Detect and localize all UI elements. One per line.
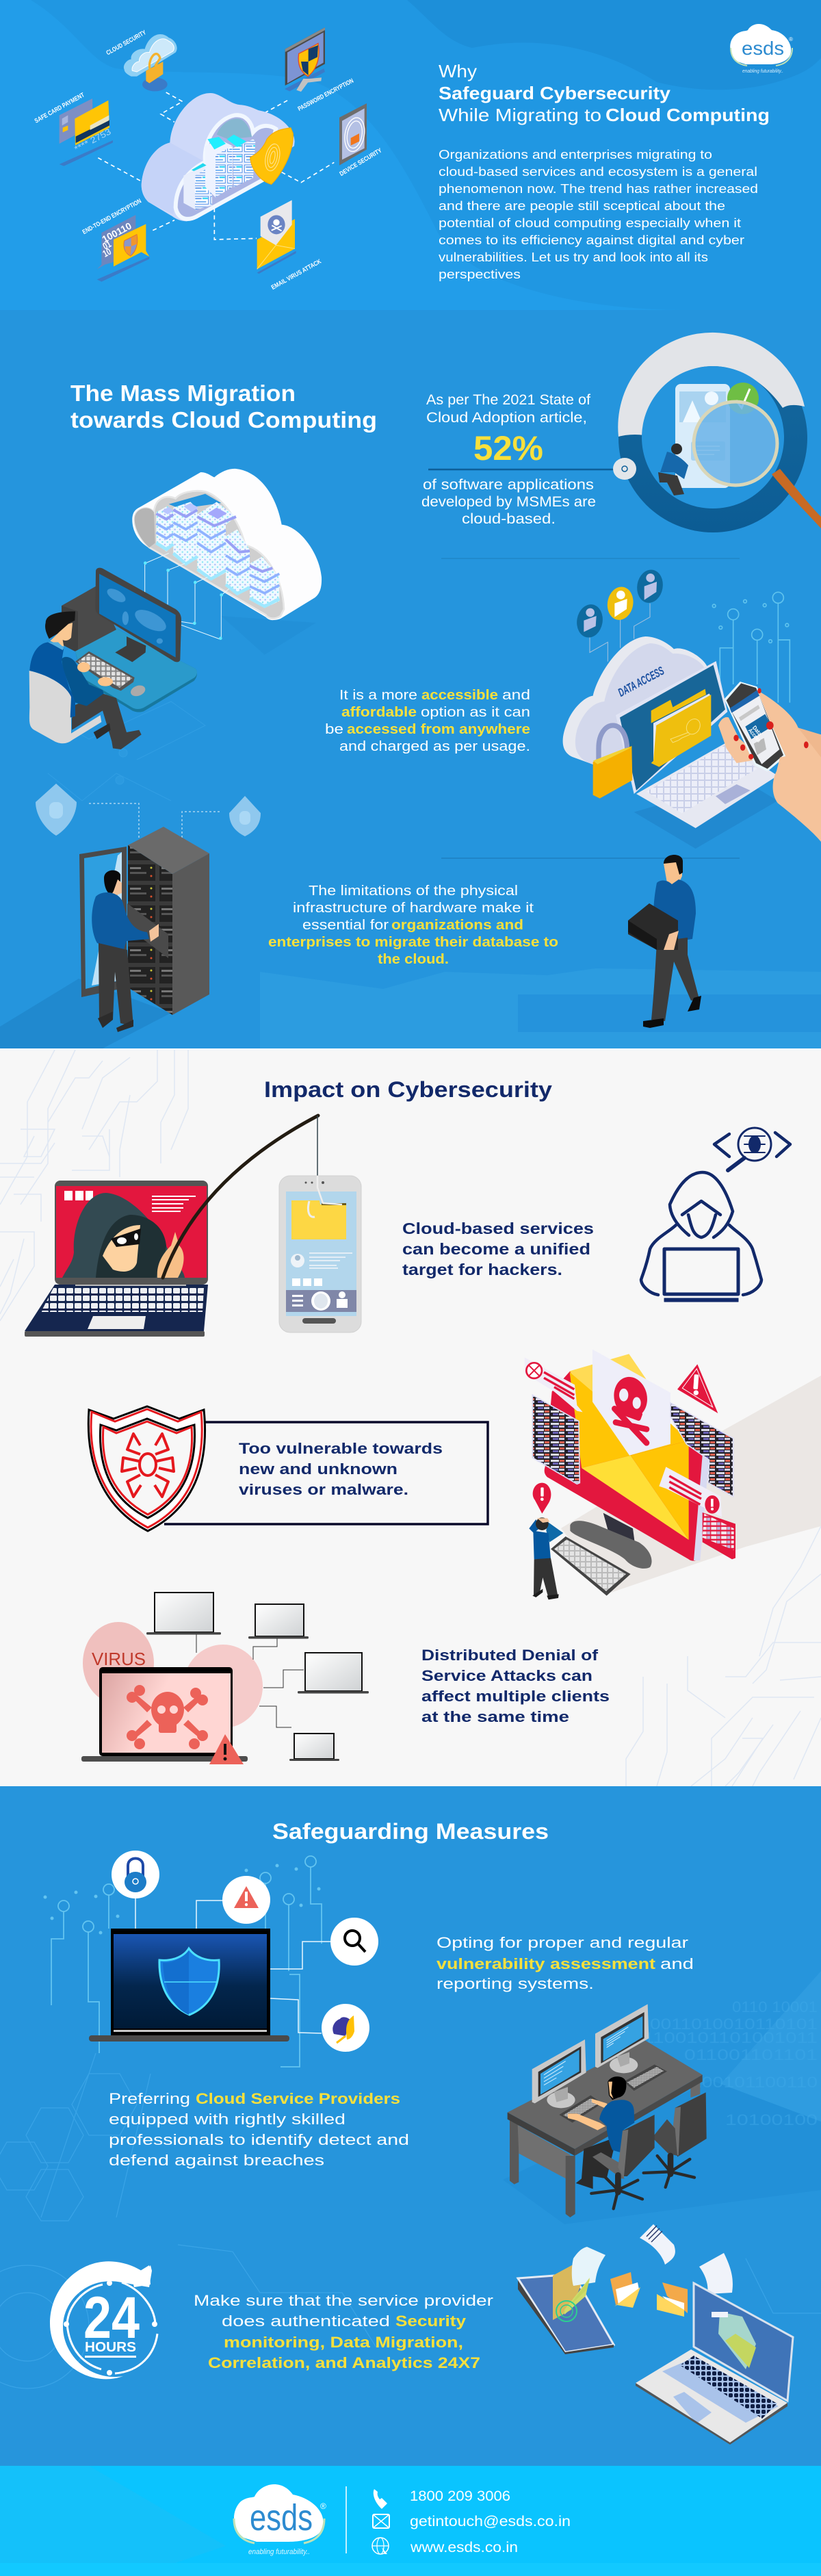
text: security monitoring 24x7: Security (395, 2313, 467, 2330)
illustration: malware envelope monitor (525, 1350, 735, 1599)
logo: esds footer: ® (320, 2501, 326, 2511)
title: why safeguard cybersecurity: While Migrating to (439, 105, 601, 125)
icon: 24 hours badge: HOURS (85, 2340, 136, 2355)
text: accessible and affordable: affordable (341, 705, 417, 720)
text: intro paragraph: phenomenon now. The trend has rather increased (439, 182, 758, 196)
contact: phone (374, 2488, 510, 2509)
icon: password encryption: PASSWORD ENCRYPTION (297, 77, 354, 112)
logo: esds top (730, 24, 793, 74)
text: limitations of physical infrastructure: enterprises to migrate their database to (268, 935, 558, 950)
text: security monitoring 24x7: does authenticated (222, 2313, 390, 2330)
text: accessible and affordable: option as it can (421, 705, 530, 720)
heading: the mass migration: towards Cloud Computing (70, 407, 377, 433)
text: accessible and affordable: and (502, 688, 530, 703)
illustration: server rack with engineer (36, 784, 261, 1032)
heading: the mass migration: The Mass Migration (70, 381, 296, 406)
text: accessible and affordable: be (325, 722, 343, 737)
illustration: data access laptop (563, 567, 821, 849)
text: accessible and affordable: accessible (421, 688, 498, 703)
illustration: cloud data centre with user (29, 469, 322, 749)
logo: esds footer: esds (250, 2497, 313, 2538)
illustration: phishing hacker laptop (25, 1116, 318, 1337)
icon: device security: DEVICE SECURITY (339, 146, 383, 177)
illustration: data access laptop: DATA ACCESS (616, 664, 666, 699)
text: vulnerability assessment: and (660, 1955, 694, 1972)
logo: esds footer: enabling futurability.. (248, 2548, 310, 2556)
text: cloud service providers: Preferring (109, 2090, 190, 2107)
logo: esds footer (234, 2484, 326, 2556)
icon: safe card payment: SAFE CARD PAYMENT (34, 91, 86, 125)
text: vulnerable towards viruses: Too vulnerable towards (239, 1440, 443, 1457)
icon: hacker outline with bug search (641, 1128, 790, 1302)
text: security monitoring 24x7 (194, 2292, 493, 2371)
icon: end to end encryption: 10 (101, 246, 113, 259)
stat: 52 percent: Cloud Adoption article, (426, 410, 587, 426)
illustration: laptop shield with icons (44, 1851, 378, 2067)
heading: impact on cybersecurity: Impact on Cybersecurity (264, 1077, 552, 1102)
text: security monitoring 24x7: Make sure that the service provider (194, 2292, 493, 2309)
contact: website (372, 2538, 518, 2555)
icon: email virus attack (257, 200, 322, 291)
text: distributed denial of service: Service Attacks can (421, 1667, 592, 1684)
panel: safeguarding measures (0, 1786, 821, 2466)
illustration: magnifier ring (613, 333, 821, 532)
text: intro paragraph (439, 148, 758, 281)
illustration: data access laptop: Data (751, 724, 764, 737)
panel: intro (0, 0, 821, 310)
logo: esds top: esds (742, 38, 784, 59)
panel: safeguarding measures: 0011010010110101 (650, 2015, 818, 2033)
logo: esds top: ® (789, 36, 793, 42)
text: vulnerable towards viruses (239, 1440, 443, 1498)
icon: spider shield (88, 1406, 205, 1531)
panel: mass migration (0, 310, 821, 1048)
text: unified target: can become a unified (402, 1240, 590, 1258)
illustration: man carrying server (628, 855, 701, 1028)
title: why safeguard cybersecurity: Why (439, 61, 477, 81)
text: intro paragraph: perspectives (439, 268, 521, 281)
stat: 52 percent: developed by MSMEs are (421, 494, 596, 510)
text: intro paragraph: Organizations and enterprises migrating to (439, 148, 712, 162)
icon: safe card payment (34, 91, 113, 166)
title: why safeguard cybersecurity: Safeguard Cybersecurity (439, 83, 671, 103)
callout: vulnerable box (88, 1406, 488, 1531)
stat: 52 percent: As per The 2021 State of (426, 392, 590, 408)
panel: footer (0, 2466, 821, 2576)
text: distributed denial of service: affect multiple clients (421, 1688, 610, 1705)
text: vulnerability assessment: vulnerability assessment (436, 1955, 656, 1972)
icon: end to end encryption (81, 197, 149, 282)
icon: end to end encryption: 100110 (100, 220, 133, 245)
text: distributed denial of service (421, 1647, 610, 1725)
illustration: data access laptop: Access (747, 727, 763, 744)
contact: email: getintouch@esds.co.in (410, 2514, 571, 2529)
text: security monitoring 24x7: monitoring, Data Migration, (224, 2334, 463, 2351)
icon: password encryption (285, 27, 354, 112)
text: accessible and affordable (325, 688, 530, 754)
text: intro paragraph: potential of cloud computing especially when it (439, 216, 741, 230)
text: security monitoring 24x7: Correlation, and Analytics 24X7 (208, 2354, 480, 2371)
heading: the mass migration (70, 381, 377, 433)
icon: safe card payment: **** 2753 (73, 127, 113, 154)
text: limitations of physical infrastructure: the cloud. (378, 952, 449, 967)
icon: device security (339, 103, 383, 177)
text: intro paragraph: comes to its efficiency against digital and cyber (439, 233, 744, 247)
text: cloud service providers: Cloud Service Providers (196, 2090, 400, 2107)
heading: safeguarding measures: Safeguarding Measures (272, 1819, 549, 1844)
text: vulnerable towards viruses: new and unknown (239, 1460, 398, 1478)
stat: 52 percent (421, 392, 620, 527)
icon: email virus attack: EMAIL VIRUS ATTACK (270, 258, 322, 291)
text: intro paragraph: and there are people still sceptical about the (439, 199, 725, 213)
icon: end to end encryption: 01 (101, 238, 113, 252)
text: vulnerability assessment: reporting systems. (436, 1975, 594, 1992)
text: limitations of physical infrastructure: essential for (302, 918, 389, 933)
icon: 24 hours badge (50, 2261, 157, 2379)
panel: safeguarding measures: 1100101101001011 (643, 2029, 818, 2046)
logo: esds top: enabling futurability.. (742, 69, 783, 74)
text: distributed denial of service: Distributed Denial of (421, 1647, 599, 1664)
text: distributed denial of service: at the same time (421, 1708, 569, 1725)
panel: safeguarding measures: 100101100110 (691, 2074, 818, 2091)
text: accessible and affordable: It is a more (339, 688, 417, 703)
icon: cloud security: CLOUD SECURITY (105, 29, 148, 56)
illustration: security desk operator (508, 2004, 707, 2217)
illustration: DDoS network of laptops: VIRUS (92, 1649, 146, 1669)
text: unified target: Cloud-based services (402, 1220, 594, 1237)
panel: safeguarding measures: 011001101101 (684, 2046, 818, 2063)
text: cloud service providers (109, 2090, 409, 2169)
text: limitations of physical infrastructure: infrastructure of hardware make it (293, 901, 534, 916)
panel: impact on cybersecurity (0, 1048, 821, 1786)
icon: 24 hours badge: 24 (83, 2285, 140, 2351)
icon: cloud security (105, 29, 177, 91)
text: vulnerability assessment (436, 1934, 694, 1992)
text: limitations of physical infrastructure: organizations and (391, 918, 523, 933)
text: accessible and affordable: accessed from anywhere (347, 722, 530, 737)
text: vulnerable towards viruses: viruses or malware. (239, 1481, 408, 1498)
title: why safeguard cybersecurity: Cloud Computing (605, 105, 770, 125)
text: cloud service providers: professionals to identify detect and (109, 2131, 409, 2148)
title: why safeguard cybersecurity (439, 61, 770, 125)
text: accessible and affordable: and charged as per usage. (339, 739, 530, 754)
diagram: cloud security hub (98, 92, 334, 240)
panel: safeguarding measures: 0110 10001 (732, 1998, 818, 2015)
text: cloud service providers: equipped with rightly skilled (109, 2111, 346, 2128)
stat: 52 percent: of software applications (423, 477, 594, 493)
text: intro paragraph: cloud-based services and ecosystem is a general (439, 165, 757, 179)
contact: phone: 1800 209 3006 (410, 2488, 510, 2504)
text: limitations of physical infrastructure (268, 884, 558, 967)
illustration: file transfer phone to laptop (518, 2224, 793, 2445)
text: limitations of physical infrastructure: The limitations of the physical (309, 884, 518, 899)
illustration: DDoS network of laptops (81, 1593, 369, 1764)
text: unified target: target for hackers. (402, 1261, 562, 1278)
text: vulnerability assessment: Opting for proper and regular (436, 1934, 688, 1951)
text: intro paragraph: vulnerabilities. Let us try and look into all its (439, 250, 708, 264)
stat: 52 percent: cloud-based. (462, 511, 556, 527)
contact: website: www.esds.co.in (410, 2540, 518, 2555)
icon: end to end encryption: END-TO-END ENCRYPTION (81, 197, 142, 235)
panel: safeguarding measures: 10100100 (725, 2111, 818, 2128)
text: cloud service providers: defend against breaches (109, 2152, 324, 2169)
text: unified target (402, 1220, 594, 1278)
stat: 52 percent: 52% (473, 429, 543, 467)
illustration: phone with hook (279, 1176, 361, 1332)
